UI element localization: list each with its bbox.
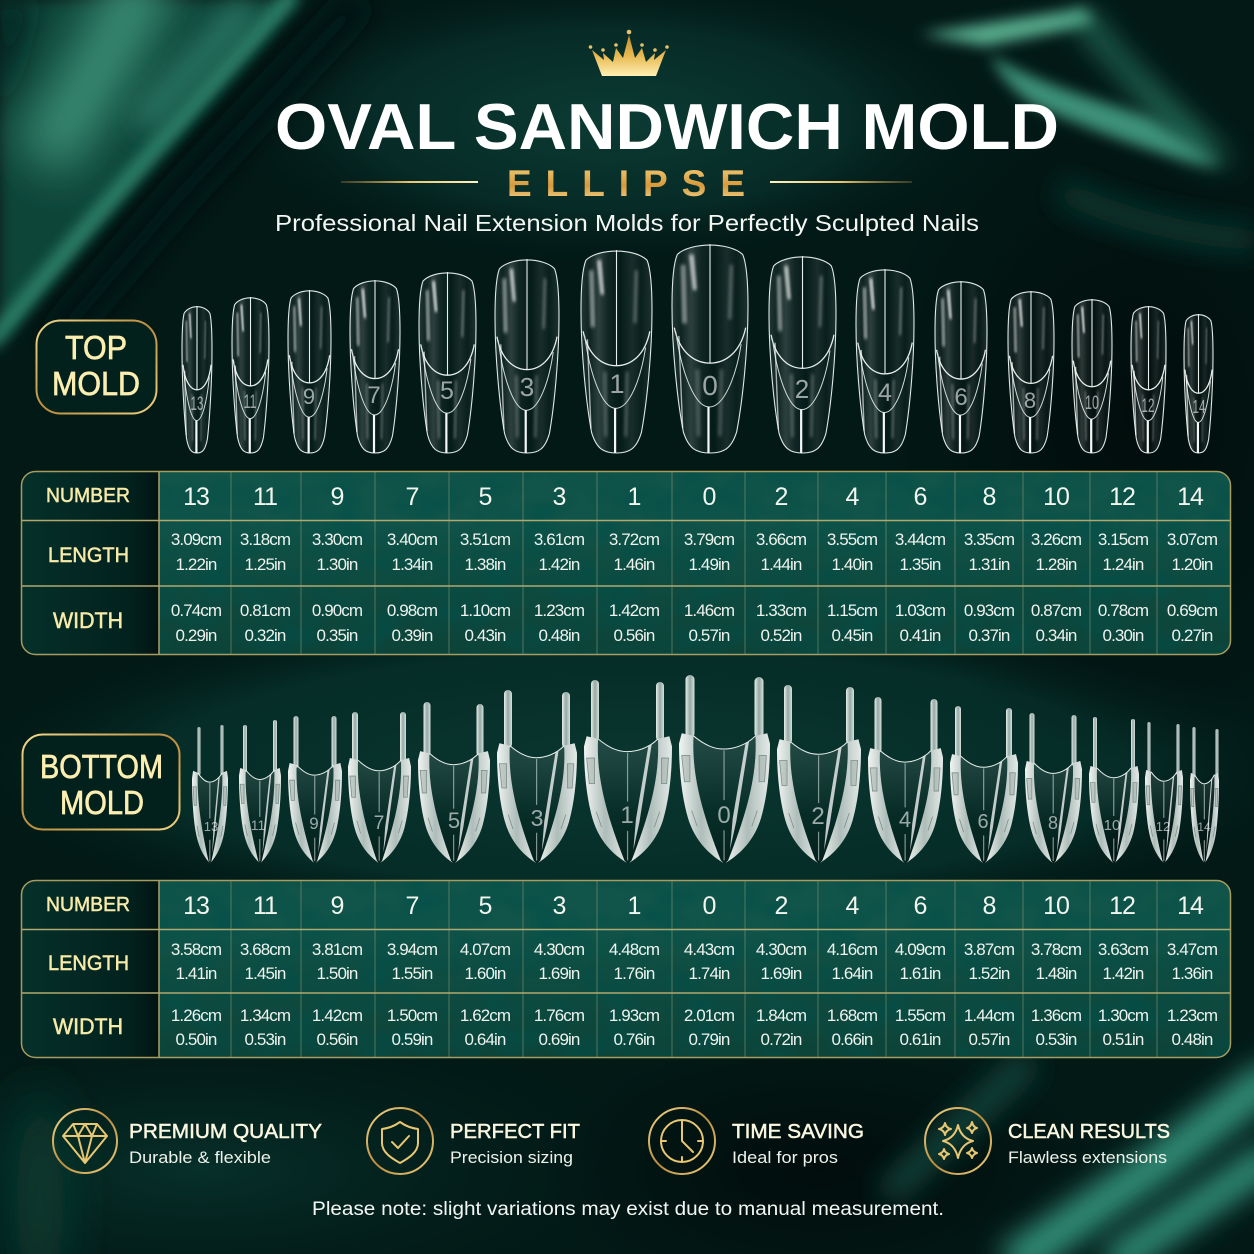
form 14: 14 [1197,820,1211,834]
width row in: 0.45in [832,626,873,645]
feature: time saving [649,1108,864,1174]
form 4 [868,697,943,863]
length row cm: 3.09cm [171,530,222,549]
width row in: 0.51in [1103,1030,1144,1049]
length row in: 1.25in [245,555,286,574]
length row in: 1.35in [900,555,941,574]
bottom mold nails [192,675,1219,863]
width row in: 0.48in [539,626,580,645]
length row in: 1.41in [176,964,217,983]
top mold label [36,320,156,414]
number row: 4 [846,483,860,511]
top mold nails [182,244,1213,453]
length row cm: 3.79cm [684,530,735,549]
row labels: LENGTH [48,544,129,567]
width row cm: 1.76cm [534,1006,585,1025]
length row cm: 4.30cm [534,940,585,959]
feature: clean results: CLEAN RESULTS [1008,1121,1170,1143]
length row cm: 3.26cm [1031,530,1082,549]
width row cm: 1.68cm [827,1006,878,1025]
number row: 8 [983,892,996,920]
form 3: 3 [531,805,543,831]
width row cm: 1.93cm [609,1006,660,1025]
nail 4 [856,269,914,453]
length row cm: 3.66cm [756,530,807,549]
width row in: 0.48in [1172,1030,1213,1049]
width row cm: 1.44cm [964,1006,1015,1025]
length row in: 1.28in [1036,555,1077,574]
number row: 12 [1109,483,1135,511]
bottom mold label: BOTTOM [40,748,163,785]
width row cm: 0.93cm [964,601,1015,620]
length row in: 1.30in [317,555,358,574]
form 10: 10 [1104,817,1120,834]
length row cm: 3.94cm [387,940,438,959]
nail 11: 11 [244,392,256,413]
form 13: 13 [204,819,218,834]
length row in: 1.22in [176,555,217,574]
length row in: 1.42in [1103,964,1144,983]
width row cm: 0.69cm [1167,601,1218,620]
width row cm: 1.42cm [312,1006,363,1025]
feature: perfect fit [367,1108,580,1174]
width row cm: 0.87cm [1031,601,1082,620]
length row cm: 3.35cm [964,530,1015,549]
nail 6 [935,281,987,453]
nail 5: 5 [440,377,454,405]
bottom mold table [21,880,1231,1058]
number row: 4 [846,892,860,920]
tagline: Professional Nail Extension Molds for Perfectly Sculpted Nails [275,210,979,236]
width row cm: 0.81cm [240,601,291,620]
width row in: 0.39in [392,626,433,645]
number row: 11 [253,892,277,920]
length row in: 1.60in [465,964,506,983]
width row in: 0.35in [317,626,358,645]
form 0: 0 [717,802,731,829]
width row cm: 1.23cm [534,601,585,620]
feature: time saving: Ideal for pros [732,1148,838,1167]
form 0 [679,675,770,863]
number row: 3 [553,892,566,920]
top mold table [21,471,1231,655]
length row in: 1.24in [1103,555,1144,574]
row labels [46,485,130,633]
number row: 14 [1177,483,1204,511]
length row cm: 3.61cm [534,530,585,549]
nail 10: 10 [1085,393,1099,414]
length row cm: 4.09cm [895,940,946,959]
width row cm: 1.46cm [684,601,735,620]
form 5 [418,702,490,863]
form 1: 1 [620,802,634,829]
width row in: 0.56in [614,626,655,645]
number row: 14 [1177,892,1204,920]
width row in: 0.50in [176,1030,217,1049]
nail 8: 8 [1024,388,1036,413]
width row in: 0.59in [392,1030,433,1049]
length row in: 1.40in [832,555,873,574]
length row cm: 4.07cm [460,940,511,959]
number row: 6 [914,483,927,511]
icon: diamond [53,1109,117,1173]
nail 3 [495,259,559,453]
form 1 [584,680,672,863]
form 4: 4 [899,807,911,832]
number row: 0 [703,483,716,511]
width row in: 0.53in [1036,1030,1077,1049]
form 12 [1145,722,1183,863]
number row: 13 [183,483,209,511]
width row cm: 1.03cm [895,601,946,620]
width row in: 0.34in [1036,626,1077,645]
width row in: 0.57in [689,626,730,645]
nail 14 [1184,314,1213,453]
form 6 [950,706,1018,863]
width row cm: 1.15cm [827,601,878,620]
form 8 [1025,713,1082,863]
width row in: 0.57in [969,1030,1010,1049]
form 7: 7 [374,813,384,834]
width row in: 0.41in [900,626,941,645]
length row in: 1.61in [900,964,941,983]
nail 5 [419,272,476,453]
feature: premium quality: PREMIUM QUALITY [129,1121,322,1143]
length row in: 1.44in [761,555,802,574]
width row cm: 1.42cm [609,601,660,620]
form 9: 9 [309,814,319,833]
nail 2 [769,256,836,453]
icon: clock [649,1108,715,1174]
icon: crown [589,30,669,76]
feature: premium quality [53,1109,322,1173]
number row: 10 [1043,892,1069,920]
nail 6: 6 [954,384,968,411]
width row cm: 1.84cm [756,1006,807,1025]
length row in: 1.52in [969,964,1010,983]
length row in: 1.74in [689,964,730,983]
nail 2: 2 [795,374,809,404]
number row: 11 [253,483,277,511]
row labels: LENGTH [48,952,129,975]
number row: 7 [406,483,419,511]
length row cm: 3.72cm [609,530,660,549]
length row cm: 3.18cm [240,530,291,549]
footnote: Please note: slight variations may exist due to manual measurement. [312,1199,944,1220]
nail 12: 12 [1142,396,1154,417]
form 2: 2 [811,803,825,830]
length row cm: 3.51cm [460,530,511,549]
width row in: 0.76in [614,1030,655,1049]
row labels: WIDTH [53,1014,123,1039]
length row in: 1.36in [1172,964,1213,983]
width row cm: 1.55cm [895,1006,946,1025]
number row: 6 [914,892,927,920]
length row cm: 3.87cm [964,940,1015,959]
length row in: 1.64in [832,964,873,983]
nail 7: 7 [367,382,381,409]
row labels [46,894,130,1039]
width row cm: 1.50cm [387,1006,438,1025]
length row in: 1.55in [392,964,433,983]
nail 13: 13 [190,394,204,415]
length row cm: 3.68cm [240,940,291,959]
form 3 [497,690,577,863]
number row: 9 [331,892,344,920]
length row in: 1.76in [614,964,655,983]
feature: perfect fit: Precision sizing [450,1148,573,1167]
length row in: 1.34in [392,555,433,574]
length row cm: 3.55cm [827,530,878,549]
width row cm: 1.30cm [1098,1006,1149,1025]
width row cm: 1.33cm [756,601,807,620]
icon: shield [367,1108,433,1174]
length row cm: 4.43cm [684,940,735,959]
width row in: 0.37in [969,626,1010,645]
number row: 1 [628,892,641,920]
form 10 [1089,717,1139,863]
length row cm: 3.15cm [1098,530,1149,549]
length row cm: 3.78cm [1031,940,1082,959]
nail 10 [1072,299,1112,453]
number row: 5 [479,483,492,511]
bottom mold label [22,734,180,830]
nail 13 [182,306,212,453]
width row in: 0.53in [245,1030,286,1049]
width row cm: 0.90cm [312,601,363,620]
nail 14: 14 [1192,397,1206,417]
form 14 [1190,727,1219,863]
top mold label: TOP [65,329,127,366]
form 8: 8 [1048,813,1058,833]
width row cm: 1.34cm [240,1006,291,1025]
nail 11 [232,297,269,453]
width row cm: 1.36cm [1031,1006,1082,1025]
width row cm: 1.23cm [1167,1006,1218,1025]
number row: 1 [628,483,641,511]
feature: perfect fit: PERFECT FIT [450,1121,580,1143]
form 9 [288,716,342,863]
length row cm: 3.58cm [171,940,222,959]
length row cm: 3.07cm [1167,530,1218,549]
width row cm: 1.10cm [460,601,511,620]
length row in: 1.49in [689,555,730,574]
form 5: 5 [448,808,460,833]
width row cm: 2.01cm [684,1006,735,1025]
width row in: 0.79in [689,1030,730,1049]
icon: sparkles [925,1108,991,1174]
width row cm: 1.26cm [171,1006,222,1025]
nail 12 [1131,306,1166,453]
width row in: 0.64in [465,1030,506,1049]
length row in: 1.69in [539,964,580,983]
number row: 8 [983,483,996,511]
length row cm: 3.81cm [312,940,363,959]
number row: 3 [553,483,566,511]
form 11: 11 [251,817,265,833]
number row: 2 [775,483,788,511]
form 2 [777,685,861,863]
width row cm: 0.78cm [1098,601,1149,620]
form 13 [192,725,228,863]
width row cm: 0.74cm [171,601,222,620]
width row in: 0.61in [900,1030,941,1049]
feature: clean results [925,1108,1170,1174]
number row: 7 [406,892,419,920]
row labels: WIDTH [53,608,123,633]
number row: 2 [775,892,788,920]
width row in: 0.69in [539,1030,580,1049]
width row in: 0.30in [1103,626,1144,645]
bottom mold label: MOLD [60,784,144,821]
nail 9: 9 [303,384,315,409]
feature: clean results: Flawless extensions [1008,1148,1167,1167]
number row: 9 [331,483,344,511]
length row cm: 4.30cm [756,940,807,959]
length row cm: 3.44cm [895,530,946,549]
width row in: 0.56in [317,1030,358,1049]
nail 3: 3 [520,372,534,402]
subtitle: ellipse: ELLIPSE [507,163,745,204]
length row in: 1.69in [761,964,802,983]
width row in: 0.72in [761,1030,802,1049]
number row: 12 [1109,892,1135,920]
width row in: 0.52in [761,626,802,645]
width row in: 0.32in [245,626,286,645]
width row cm: 1.62cm [460,1006,511,1025]
length row in: 1.31in [969,555,1010,574]
row labels: NUMBER [46,894,130,916]
length row cm: 4.16cm [827,940,878,959]
nail 7 [350,280,400,453]
nail 1: 1 [609,369,625,399]
length row cm: 4.48cm [609,940,660,959]
length row in: 1.38in [465,555,506,574]
form 6: 6 [977,811,989,833]
form 12: 12 [1156,819,1170,834]
length row in: 1.20in [1172,555,1213,574]
number row: 10 [1043,483,1069,511]
feature: time saving: TIME SAVING [732,1121,864,1143]
length row in: 1.48in [1036,964,1077,983]
width row in: 0.29in [176,626,217,645]
row labels: NUMBER [46,485,130,507]
length row in: 1.45in [245,964,286,983]
top mold label: MOLD [52,365,140,402]
length row cm: 3.47cm [1167,940,1218,959]
form 7 [348,712,411,863]
length row cm: 3.40cm [387,530,438,549]
nail 8 [1008,291,1054,453]
number row: 5 [479,892,492,920]
number row: 0 [703,892,716,920]
form 11 [239,720,281,863]
length row in: 1.42in [539,555,580,574]
title: OVAL SANDWICH MOLD [275,90,1059,163]
nail 1 [581,250,652,453]
width row cm: 0.98cm [387,601,438,620]
nail 4: 4 [878,379,892,407]
width row in: 0.27in [1172,626,1213,645]
width row in: 0.43in [465,626,506,645]
nail 9 [288,290,331,453]
nail 0 [672,244,748,453]
nail 0: 0 [702,370,718,401]
length row cm: 3.63cm [1098,940,1149,959]
feature: premium quality: Durable & flexible [129,1148,271,1167]
length row in: 1.46in [614,555,655,574]
number row: 13 [183,892,209,920]
width row in: 0.66in [832,1030,873,1049]
length row in: 1.50in [317,964,358,983]
length row cm: 3.30cm [312,530,363,549]
